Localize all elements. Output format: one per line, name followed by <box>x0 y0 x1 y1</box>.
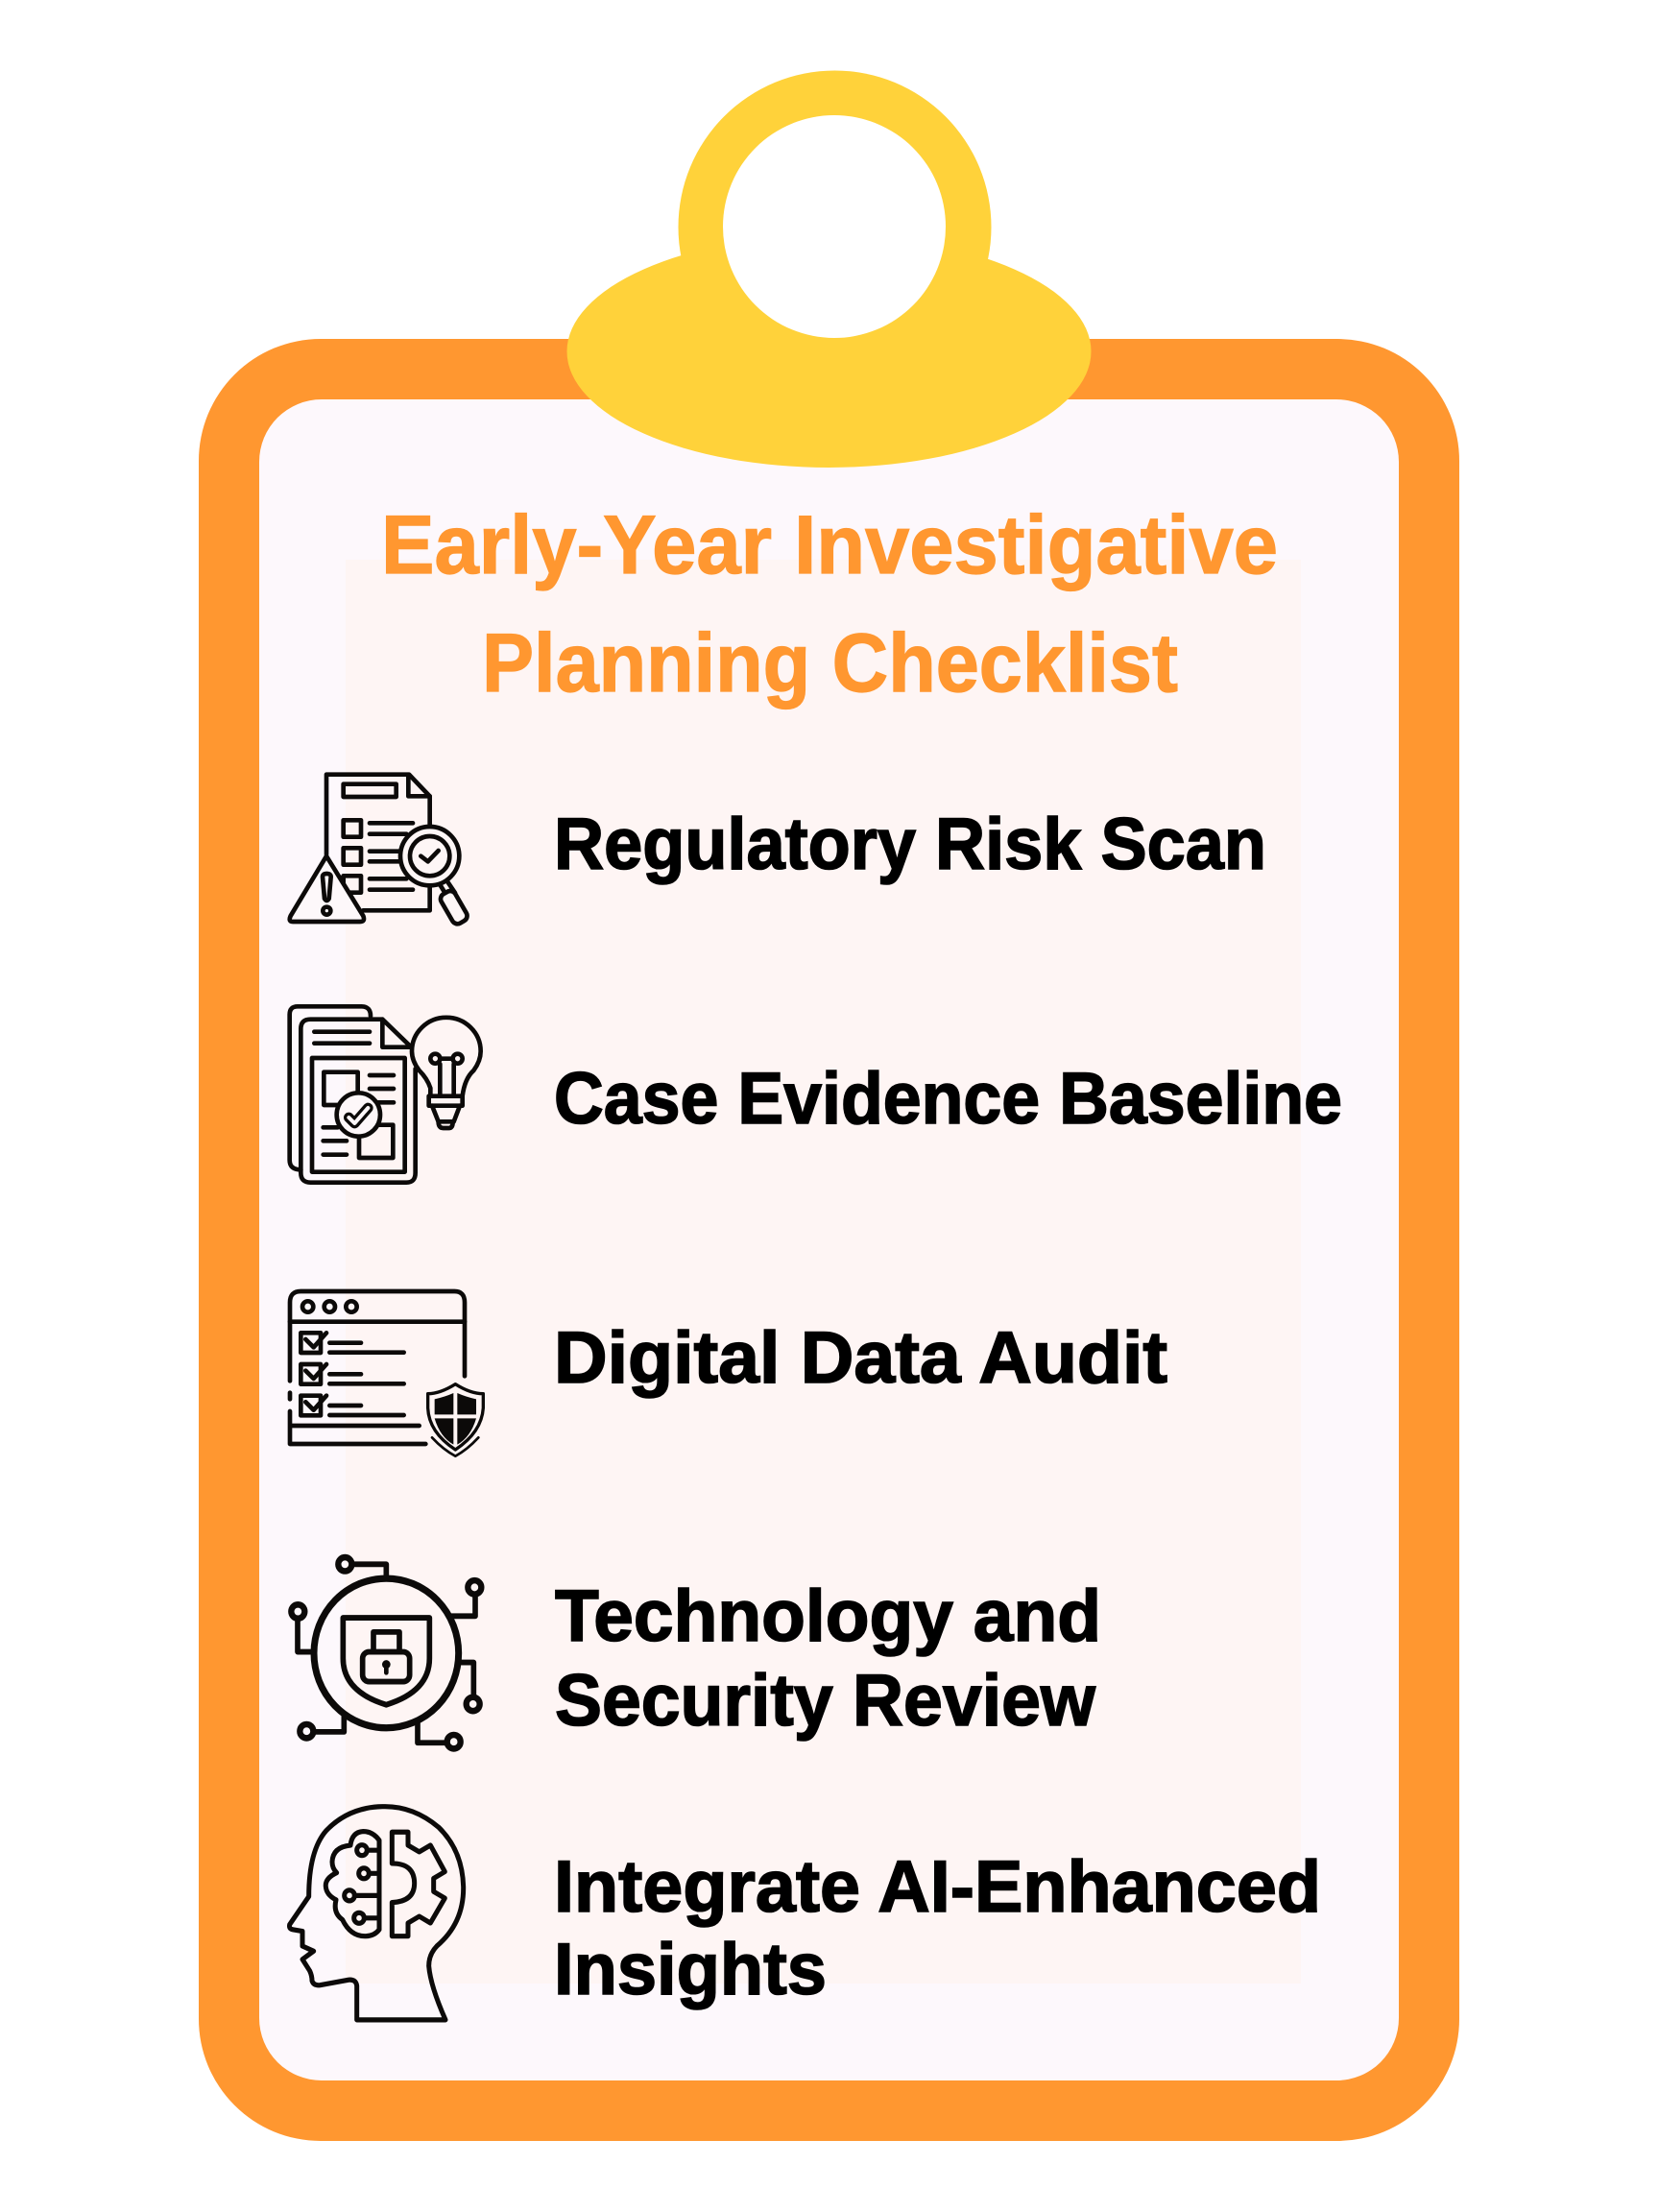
label: case evidence baseline: Case Evidence Baseline <box>554 1058 1342 1140</box>
label: technology and security review <box>555 1575 1101 1742</box>
label: technology and security review: Technology and <box>555 1575 1101 1657</box>
label: digital data audit: Digital Data Audit <box>554 1317 1167 1399</box>
clipboard board <box>199 339 1459 2141</box>
icon: case files with light bulb <box>290 1006 481 1183</box>
icon: AI head with brain and gear <box>289 1807 464 2020</box>
icon: browser checklist with shield <box>290 1291 483 1456</box>
label: integrate AI-enhanced insights: Integrate AI-Enhanced <box>554 1846 1321 1928</box>
title: Planning Checklist <box>482 617 1178 709</box>
icon: document with warning and magnifier <box>290 775 469 926</box>
label: integrate AI-enhanced insights <box>554 1846 1321 2010</box>
clipboard clip <box>566 71 1091 468</box>
title <box>381 499 1278 709</box>
label: technology and security review: Security Review <box>555 1660 1096 1742</box>
label: integrate AI-enhanced insights: Insights <box>554 1929 827 2010</box>
title: Early-Year Investigative <box>381 499 1278 591</box>
icon: security shield circuit <box>291 1557 481 1748</box>
label: regulatory risk scan: Regulatory Risk Scan <box>554 804 1266 885</box>
